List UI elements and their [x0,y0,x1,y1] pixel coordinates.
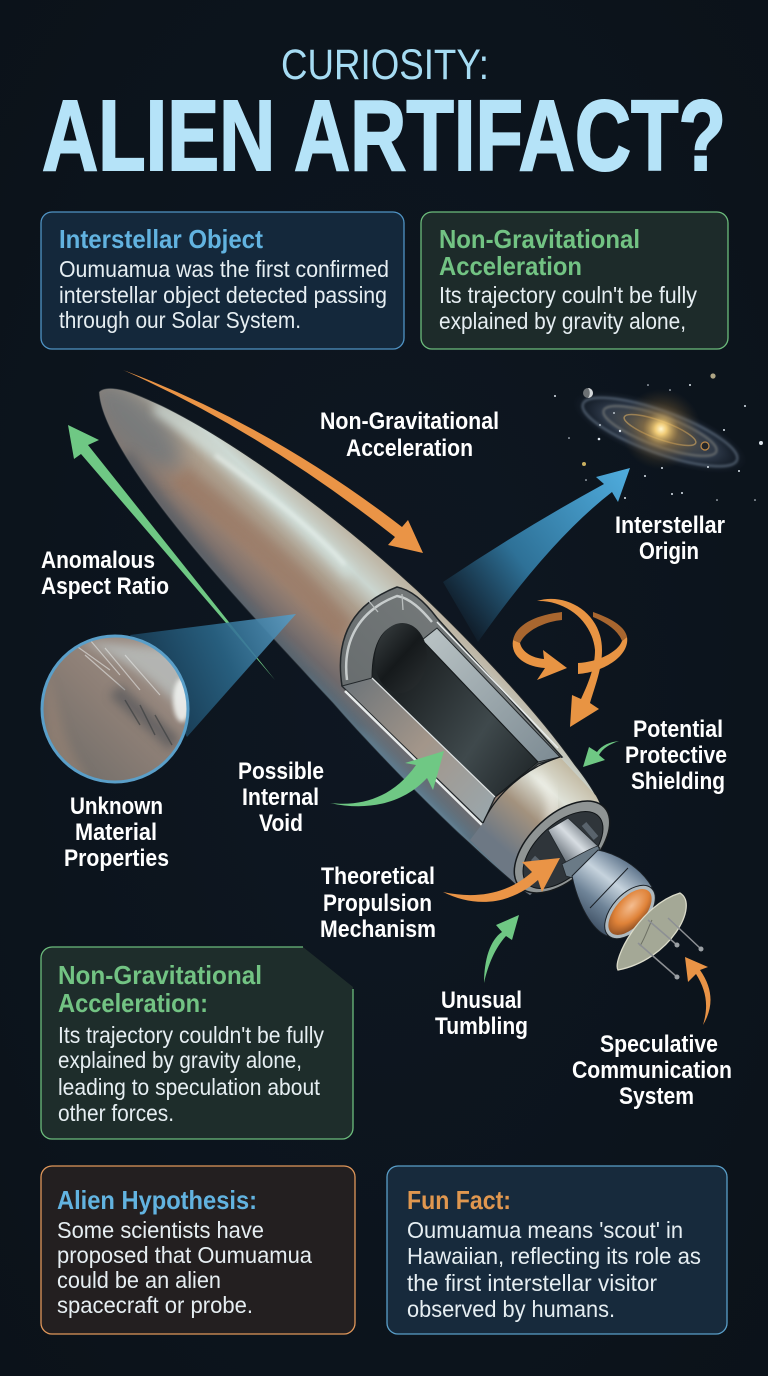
panel: fun fact: Oumuamua means 'scout' in [407,1217,683,1243]
label: non-gravitational acceleration [320,408,499,462]
panel: non-gravitational acceleration (top) [421,212,728,349]
illustration: communication dish [617,893,704,980]
arrow: theoretical propulsion [443,858,560,902]
panel: non-gravitational acceleration (lower): other forces. [58,1100,174,1126]
label: non-gravitational acceleration: Acceleration [346,435,473,462]
callout: material zoom cone [130,614,296,737]
panel: fun fact: the first interstellar visitor [407,1270,657,1296]
label: unusual tumbling: Tumbling [435,1013,528,1040]
icon: material sample [42,636,191,782]
label: interstellar origin: Origin [639,538,699,565]
panel: alien hypothesis: Alien Hypothesis: [57,1185,257,1215]
label: theoretical propulsion mechanism: Propulsion [323,890,432,917]
label: potential protective shielding: Potential [633,716,723,743]
panel: non-gravitational acceleration (lower): explained by gravity alone, [58,1047,302,1073]
label: unknown material properties [64,793,169,872]
label: possible internal void: Possible [238,758,324,785]
panel: interstellar object: Oumuamua was the first confirmed [59,256,389,282]
label: theoretical propulsion mechanism [320,863,436,943]
panel: alien hypothesis: proposed that Oumuamua [57,1242,312,1268]
label: unknown material properties: Unknown [70,793,163,820]
panel: non-gravitational acceleration (lower): leading to speculation about [58,1074,321,1100]
arrow: unusual tumbling [484,915,519,983]
illustration: spacecraft body [98,388,600,896]
label: potential protective shielding: Shielding [631,768,725,795]
label: speculative communication system [572,1031,732,1110]
label: possible internal void: Void [259,810,303,837]
panel: fun fact [387,1166,727,1334]
label: possible internal void [238,758,324,837]
illustration: galaxy [554,373,763,501]
label: potential protective shielding [625,716,727,795]
panel: non-gravitational acceleration (top): Non-Gravitational [439,224,640,254]
label: speculative communication system: Communication [572,1057,732,1084]
panel: interstellar object: interstellar object detected passing [59,282,387,308]
panel: non-gravitational acceleration (top): Its trajectory couln't be fully [439,282,697,308]
panel: fun fact: observed by humans. [407,1296,615,1322]
panel: non-gravitational acceleration (lower): Non-Gravitational [58,960,262,990]
panel: alien hypothesis: Some scientists have [57,1217,264,1243]
label: unusual tumbling [435,987,528,1040]
label: theoretical propulsion mechanism: Theoretical [321,863,435,890]
label: theoretical propulsion mechanism: Mechanism [320,916,436,943]
illustration: cutaway internal void [340,587,562,826]
panel: alien hypothesis [41,1166,355,1334]
panel: fun fact: Hawaiian, reflecting its role as [407,1243,701,1269]
label: unknown material properties: Properties [64,845,169,872]
arrow: interstellar origin [443,468,630,642]
panel: interstellar object: through our Solar System. [59,307,301,333]
label: speculative communication system: Speculative [600,1031,718,1058]
label: interstellar origin [615,512,725,565]
label: potential protective shielding: Protective [625,742,727,769]
panel: non-gravitational acceleration (lower): Acceleration: [58,988,208,1018]
label: interstellar origin: Interstellar [615,512,725,539]
panel: non-gravitational acceleration (lower): Its trajectory couldn't be fully [58,1022,324,1048]
illustration: engine and nozzle [498,784,665,948]
illustration: hull collar [470,756,600,895]
title: CURIOSITY: [281,41,489,89]
label: possible internal void: Internal [242,784,319,811]
panel: alien hypothesis: could be an alien [57,1267,221,1293]
label: non-gravitational acceleration: Non-Gravitational [320,408,499,435]
panel: non-gravitational acceleration (top): explained by gravity alone, [439,308,686,334]
label: anomalous aspect ratio: Anomalous [41,547,155,574]
label: anomalous aspect ratio [41,547,169,600]
arrow: tumbling rotation [513,599,627,727]
arrow: potential protective shielding [583,741,619,767]
panel: interstellar object [41,212,404,349]
arrow: possible internal void [330,751,444,806]
arrow: non-gravitational acceleration [123,370,423,553]
arrow: anomalous aspect ratio [68,425,275,680]
label: anomalous aspect ratio: Aspect Ratio [41,573,169,600]
label: speculative communication system: System [619,1083,694,1110]
label: unusual tumbling: Unusual [441,987,522,1014]
panel: non-gravitational acceleration (top): Acceleration [439,251,582,281]
arrow: speculative communication [685,957,711,1025]
panel: fun fact: Fun Fact: [407,1185,511,1215]
panel: interstellar object: Interstellar Object [59,224,263,254]
panel: non-gravitational acceleration (lower) [41,947,353,1139]
panel: alien hypothesis: spacecraft or probe. [57,1292,253,1318]
label: unknown material properties: Material [75,819,157,846]
